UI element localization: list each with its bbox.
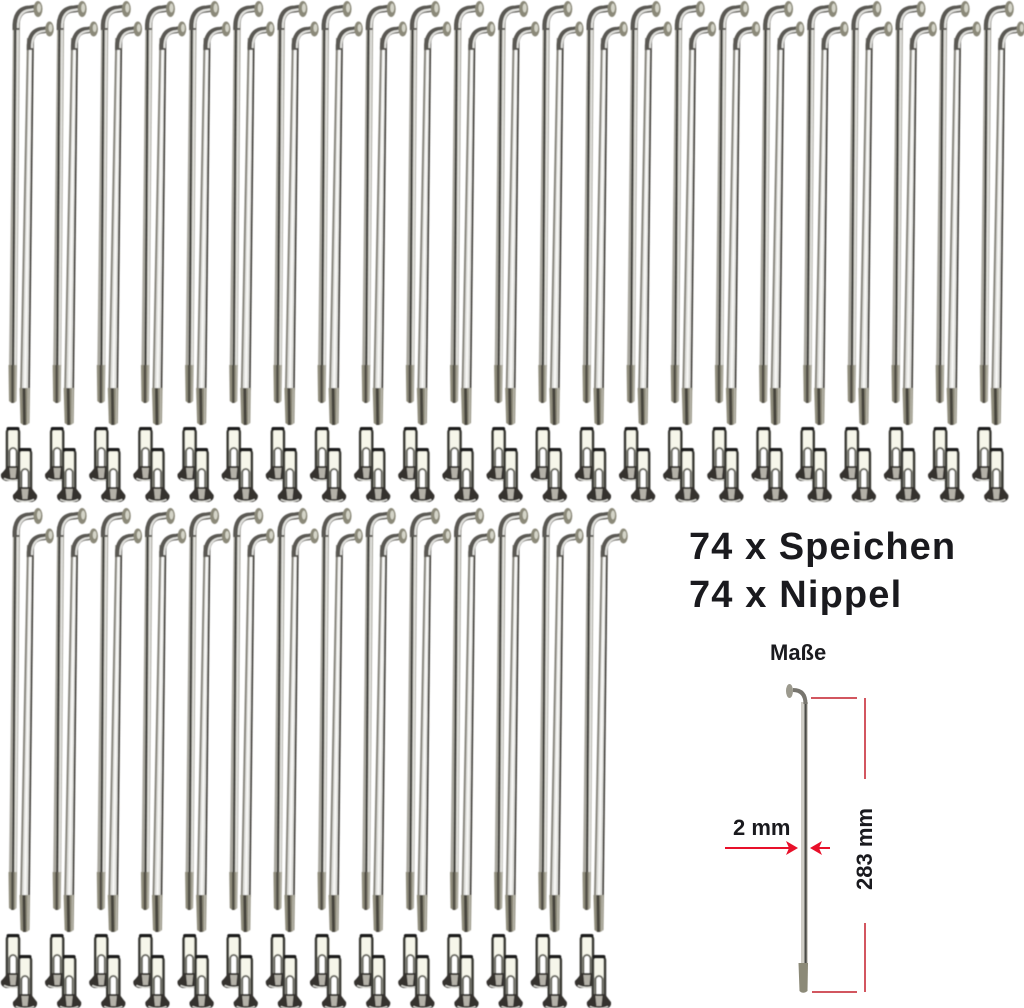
panel: top row of 23 spoke and nipple pairs	[1, 1, 1024, 502]
dimension: length 283 mm: 283 mm	[852, 808, 877, 890]
icon: single spoke	[786, 684, 808, 993]
text: spoke count: 74 x Speichen	[689, 526, 956, 568]
dimension: thickness 2 mm: 2 mm	[733, 815, 790, 840]
heading: quantities	[689, 526, 956, 616]
heading: dimensions: Maße	[770, 640, 826, 665]
panel: bottom row of 14 spoke and nipple pairs	[1, 508, 628, 1008]
text: nipple count: 74 x Nippel	[689, 574, 902, 616]
dimension: thickness 2 mm	[725, 815, 830, 855]
panel: dimensions diagram	[725, 640, 877, 993]
